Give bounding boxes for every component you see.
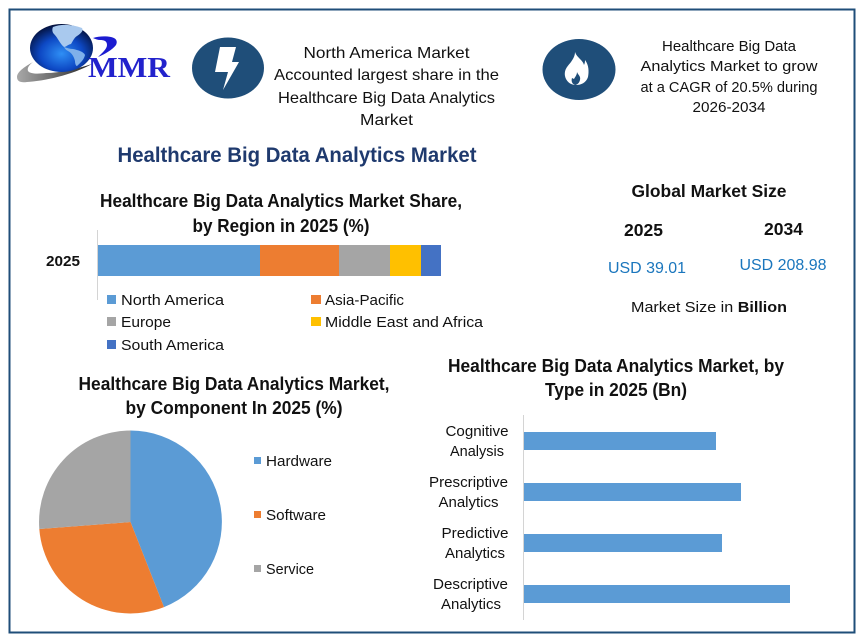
- legend: components: Service: [266, 562, 314, 578]
- heading: type chart: Type in 2025 (Bn): [545, 380, 687, 400]
- bar chart: Analytics: [438, 495, 498, 511]
- heading: type chart: [448, 356, 784, 400]
- heading: region chart: by Region in 2025 (%): [192, 216, 370, 236]
- legend: regions: Asia-Pacific: [325, 292, 404, 309]
- bar chart: Cognitive: [446, 424, 508, 440]
- heading: region chart: Healthcare Big Data Analytics Market Share,: [100, 191, 462, 211]
- heading: global market size: Global Market Size: [632, 181, 787, 201]
- callout: North America share: North America Market: [304, 45, 470, 62]
- stacked bar chart: 2025: [46, 254, 80, 270]
- callout: North America share: Healthcare Big Data Analytics: [278, 90, 495, 107]
- bar chart: Predictive: [442, 526, 508, 542]
- note: unit: Market Size in Billion: [631, 299, 787, 316]
- bar chart: [429, 415, 790, 620]
- legend: components: Hardware: [266, 454, 332, 470]
- callout: CAGR: Analytics Market to grow: [640, 59, 818, 75]
- legend: components: Software: [266, 508, 326, 524]
- bar chart: Analytics: [441, 597, 501, 613]
- title: Healthcare Big Data Analytics Market: [118, 144, 476, 167]
- callout: CAGR: Healthcare Big Data: [662, 39, 797, 55]
- legend: regions: [107, 292, 484, 354]
- panel: market share by region: [46, 191, 484, 354]
- panel: global market size: [608, 181, 827, 316]
- legend: regions: North America: [121, 292, 225, 309]
- heading: region chart: [100, 191, 462, 236]
- legend: regions: Middle East and Africa: [325, 314, 484, 331]
- pie chart: [39, 430, 222, 613]
- bar chart: Descriptive: [433, 577, 508, 593]
- icon: flame: [542, 39, 616, 100]
- heading: component chart: Healthcare Big Data Analytics Market,: [78, 374, 390, 394]
- year 2025 value: 2025: [624, 220, 663, 240]
- legend: components: [254, 454, 332, 578]
- stacked bar chart: [46, 230, 441, 300]
- icon: lightning bolt: [192, 38, 264, 98]
- year 2034 value: 2034: [764, 219, 803, 239]
- logo: MMR globe: MMR: [88, 53, 171, 84]
- legend: regions: South America: [121, 337, 225, 354]
- heading: type chart: Healthcare Big Data Analytics Market, by: [448, 356, 784, 376]
- panel: market by component: [39, 374, 389, 613]
- bar chart: Analytics: [445, 546, 505, 562]
- year 2034 value: USD 208.98: [740, 257, 827, 274]
- legend: regions: Europe: [121, 314, 171, 331]
- callout: CAGR: 2026-2034: [692, 100, 766, 116]
- heading: component chart: by Component In 2025 (%): [126, 398, 343, 418]
- callout: CAGR: at a CAGR of 20.5% during: [640, 80, 818, 96]
- year 2025 value: USD 39.01: [608, 260, 686, 277]
- year 2034 value: [740, 219, 827, 274]
- callout: North America share: Market: [360, 112, 414, 129]
- callout: North America share: Accounted largest share in the: [274, 67, 499, 84]
- bar chart: Analysis: [450, 444, 504, 460]
- logo: MMR globe: [17, 24, 171, 84]
- heading: component chart: [78, 374, 390, 418]
- callout: CAGR: [640, 39, 818, 116]
- bar chart: Prescriptive: [429, 475, 508, 491]
- panel: market by type: [429, 356, 790, 620]
- year 2025 value: [608, 220, 686, 277]
- callout: North America share: [274, 45, 499, 129]
